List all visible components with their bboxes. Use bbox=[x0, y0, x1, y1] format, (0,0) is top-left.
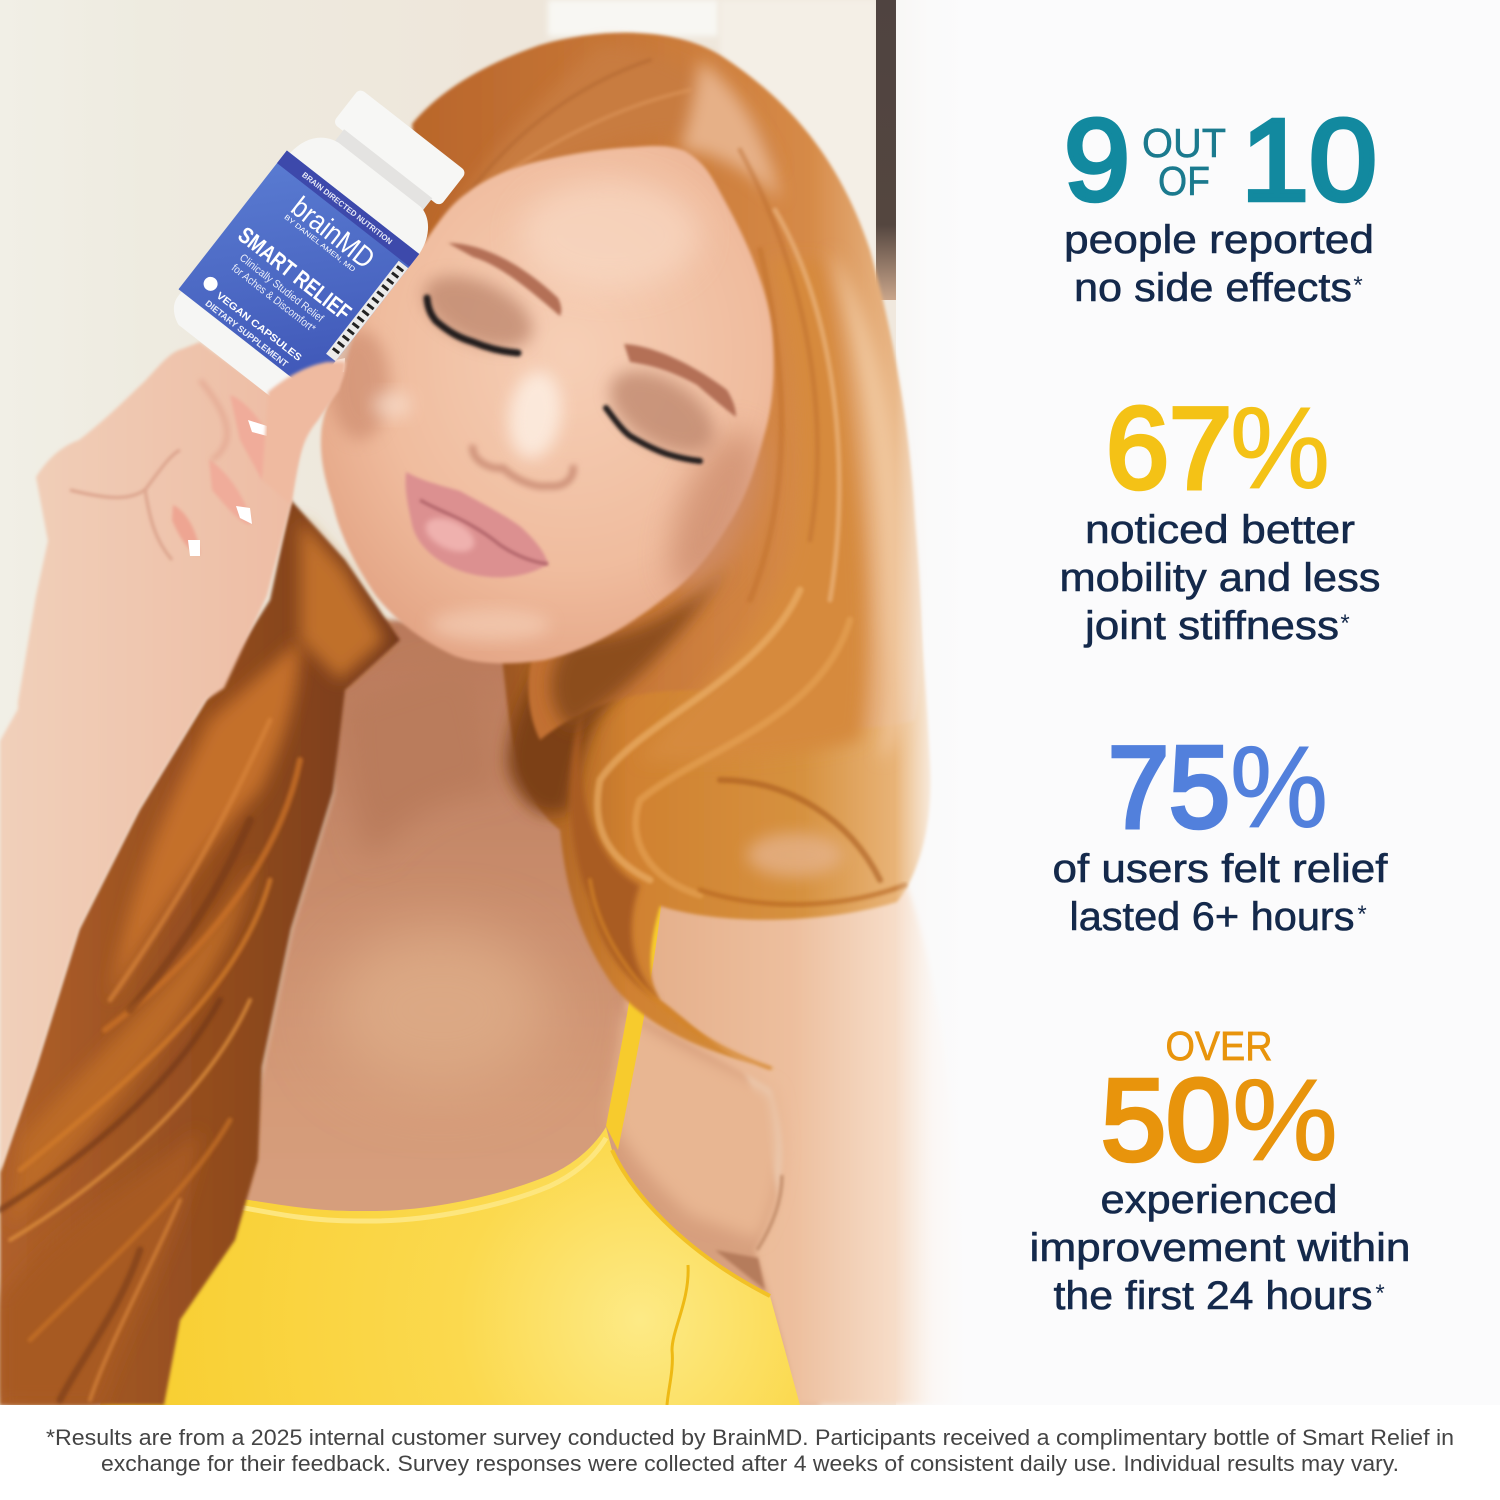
eyes and brows bbox=[413, 243, 736, 470]
stat: 67% bbox=[1060, 383, 1380, 648]
stat: 75%: % bbox=[1230, 722, 1328, 852]
stat: 67%: 67 bbox=[1106, 383, 1232, 513]
hair strands bbox=[0, 60, 905, 1400]
bottle label bbox=[178, 151, 419, 393]
stat: 67%: noticed better bbox=[1085, 508, 1355, 552]
torso skin bbox=[200, 620, 965, 1405]
stat: over 50%: improvement within bbox=[1030, 1226, 1410, 1270]
bottle: Smart Relief bbox=[174, 90, 464, 396]
stat: 67%: mobility and less bbox=[1060, 556, 1380, 600]
stat: 67%: % bbox=[1230, 383, 1330, 513]
stat: 75% bbox=[1052, 722, 1388, 939]
stat: over 50%: OVER bbox=[1166, 1023, 1272, 1069]
stat: 9 out of 10: OF bbox=[1158, 158, 1210, 204]
stat: 9 out of 10 bbox=[1064, 95, 1377, 310]
white fade into panel bbox=[898, 390, 968, 1405]
stat: 9 out of 10: 9 bbox=[1064, 95, 1130, 225]
lips bbox=[405, 472, 548, 577]
bottle label: Clinically Studied Relief bbox=[237, 252, 326, 325]
stat: 9 out of 10: * bbox=[1353, 272, 1363, 299]
stat: 9 out of 10: people reported bbox=[1064, 218, 1374, 262]
stat: 75%: lasted 6+ hours bbox=[1070, 895, 1354, 939]
bottle label: DIETARY SUPPLEMENT bbox=[203, 298, 290, 369]
stat: over 50%: * bbox=[1375, 1280, 1385, 1307]
stat: 9 out of 10: no side effects bbox=[1074, 266, 1352, 310]
bottle cap bbox=[333, 88, 467, 207]
yellow top and straps bbox=[100, 885, 800, 1405]
arm and hand bbox=[0, 342, 345, 1172]
bottle label: BY DANIEL AMEN, MD bbox=[282, 214, 356, 274]
stat: 9 out of 10: 10 bbox=[1241, 95, 1377, 225]
footer disclaimer: exchange for their feedback. Survey responses were collected after 4 weeks of consistent daily use. Individual results may vary. bbox=[101, 1451, 1399, 1476]
stat: over 50%: 50 bbox=[1101, 1055, 1231, 1185]
stat: 67%: * bbox=[1340, 610, 1350, 637]
face bbox=[321, 146, 778, 663]
hair: long left strands bbox=[0, 500, 400, 1405]
right panel background bbox=[970, 0, 1500, 1405]
bottle label: SMART RELIEF bbox=[233, 221, 356, 326]
bottle label: brainMD bbox=[285, 191, 380, 275]
stat: 75%: * bbox=[1357, 901, 1367, 928]
stat: 9 out of 10: OUT bbox=[1142, 120, 1226, 166]
hair: crown and right side bbox=[412, 33, 921, 760]
hair: lower right curl bbox=[498, 625, 932, 1064]
stat: 75%: 75 bbox=[1108, 722, 1230, 852]
stat: 75%: of users felt relief bbox=[1052, 847, 1388, 891]
stat: over 50% bbox=[1030, 1023, 1410, 1318]
bottle label: VEGAN CAPSULES bbox=[214, 290, 304, 364]
stat: 67%: joint stiffness bbox=[1084, 604, 1339, 648]
stat: over 50%: experienced bbox=[1100, 1178, 1338, 1222]
bottle label: for Aches & Discomfort* bbox=[229, 262, 318, 335]
thumb over bottle bbox=[262, 362, 345, 505]
nose bbox=[473, 368, 573, 486]
footer disclaimer bbox=[0, 1405, 1500, 1500]
bottle label: BRAIN DIRECTED NUTRITION bbox=[300, 170, 394, 246]
footer disclaimer: *Results are from a 2025 internal customer survey conducted by BrainMD. Participants received a complimentary bottle of Smart Relief in bbox=[46, 1425, 1454, 1450]
stat: over 50%: % bbox=[1232, 1055, 1338, 1185]
stat: over 50%: the first 24 hours bbox=[1054, 1274, 1372, 1318]
photo: woman holding supplement bottle bbox=[0, 0, 1000, 1405]
